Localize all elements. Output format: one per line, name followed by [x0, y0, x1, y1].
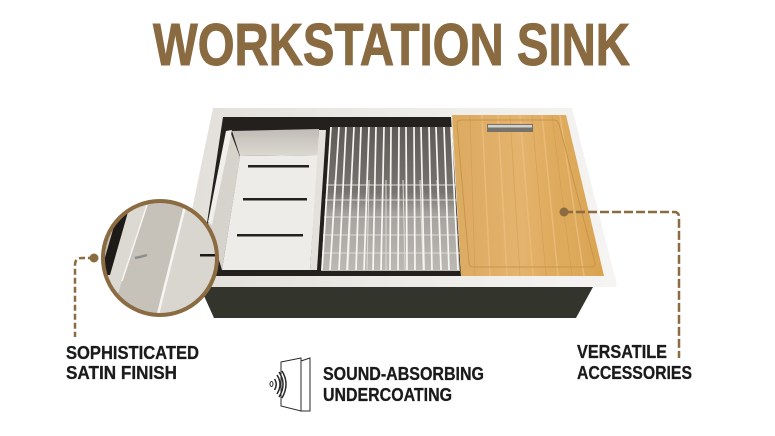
- label: versatile accessories: [577, 342, 692, 383]
- title: WORKSTATION SINK: [153, 12, 630, 78]
- label: sophisticated satin finish: SATIN FINISH: [66, 363, 177, 383]
- magnified satin finish circle: [95, 198, 220, 318]
- cutting board accessory: [452, 115, 604, 276]
- sink illustration: [176, 108, 617, 318]
- callout line: accessories: [560, 208, 679, 358]
- label: sound-absorbing undercoating: UNDERCOATING: [323, 385, 452, 405]
- label: versatile accessories: ACCESSORIES: [577, 363, 692, 383]
- sink basin: [199, 117, 461, 276]
- label: versatile accessories: VERSATILE: [577, 342, 667, 362]
- colander accessory: [208, 129, 326, 270]
- sink rim: [176, 108, 617, 287]
- callout line: satin finish: [75, 254, 98, 337]
- drying rack accessory: [321, 127, 460, 271]
- label: sophisticated satin finish: [66, 343, 199, 383]
- label: sophisticated satin finish: SOPHISTICATED: [66, 343, 199, 363]
- icon: sound hitting panels: [270, 358, 310, 411]
- label: sound-absorbing undercoating: [323, 364, 484, 405]
- label: sound-absorbing undercoating: SOUND-ABSORBING: [323, 364, 484, 384]
- sink dark base: [200, 287, 593, 318]
